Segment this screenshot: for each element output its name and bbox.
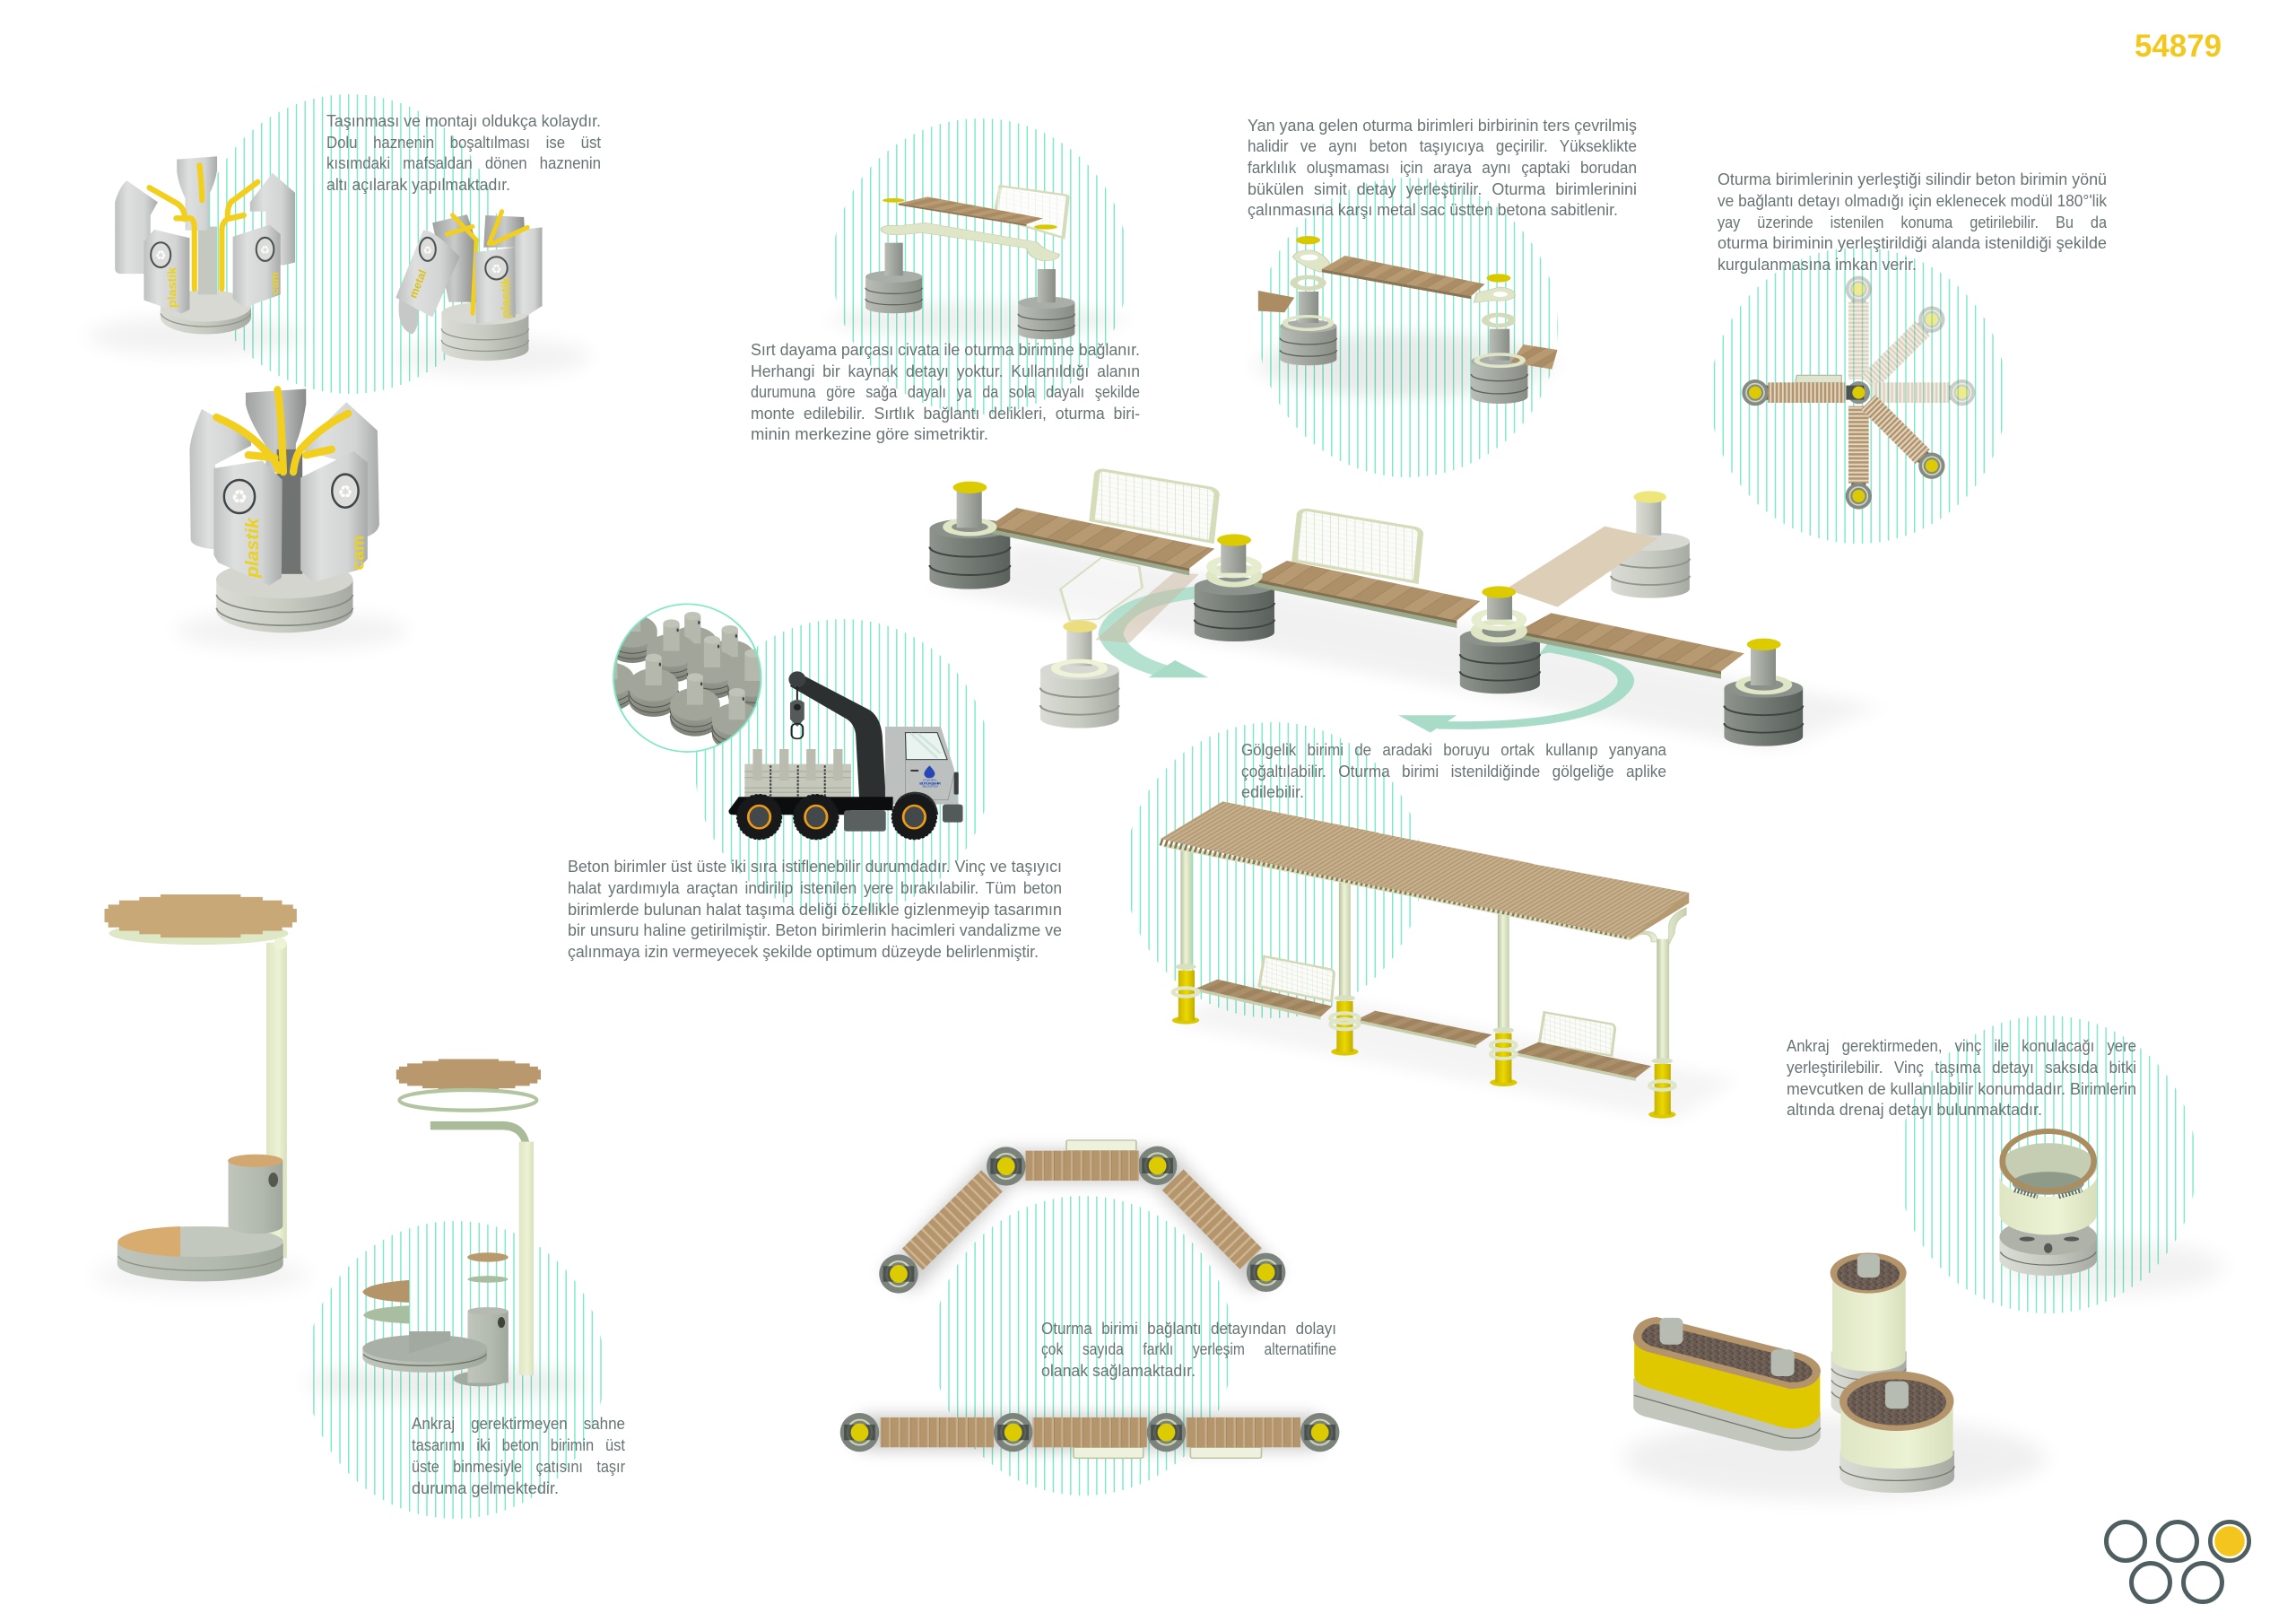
faded front unit [1040, 558, 1199, 728]
municipality logo: BÜYÜKŞEHİR [919, 781, 942, 785]
text: connection: farklılık oluşmaması için araya aynı çaptaki borudan [1248, 159, 1637, 177]
fuel tank [844, 810, 886, 832]
hatched circle: connection detail [1258, 178, 1558, 477]
hatched circle: truck [695, 619, 991, 915]
text: backrest: durumuna göre sağa dayalı ya da sola dayalı şekilde [751, 383, 1140, 401]
recycling bin: emptying, top right: ♻ [423, 244, 432, 257]
hatched circle: stage [307, 1221, 604, 1519]
hatched circle: rotation plan [1710, 248, 2006, 544]
wheel 3 [891, 795, 936, 840]
backrest 1 [1091, 470, 1217, 542]
stage: assembled [91, 894, 311, 1292]
text: rotation [1718, 170, 2108, 274]
text: backrest: Herhangi bir kaynak detayı yoktur. Kullanıldığı alanın [751, 362, 1140, 380]
chassis [728, 797, 893, 815]
planters [1622, 1131, 2224, 1500]
bumper [943, 805, 963, 823]
text: bins: Dolu haznenin boşaltılması ise üst [326, 134, 601, 152]
text: rotation: Oturma birimlerinin yerleştiği silindir beton birimin yönü [1718, 170, 2107, 188]
recycling bin: emptying, top right [394, 212, 592, 376]
text: truck: birimlerde bulunan halat taşıma deliği özellikle gizlenmeyip tasarımın [568, 901, 1062, 919]
pulley and hook [788, 671, 805, 738]
planter: oval yellow [1633, 1317, 1821, 1451]
hatched circle: planter [1899, 1016, 2196, 1313]
recycling bin: emptying, top right: ♻ [491, 263, 501, 276]
recycling bin: emptying, top right: plastik [499, 277, 513, 318]
text: bins: altı açılarak yapılmaktadır. [326, 176, 510, 194]
text: backrest: minin merkezine göre simetriktir. [751, 425, 988, 443]
cylinder and lower disc [454, 1307, 509, 1386]
backrest 2 [1294, 510, 1421, 582]
text: shelter: Gölgelik birimi de aradaki boruyu ortak kullanıp yanyana [1241, 741, 1667, 759]
wheel 1 [737, 795, 781, 840]
text: bins [326, 112, 601, 194]
text: connection: Yan yana gelen oturma birimleri birbirinin ters çevrilmiş [1248, 117, 1637, 135]
recycling bin: open, top left [86, 156, 306, 355]
seat B [1254, 561, 1480, 628]
rotation plan [1742, 276, 1975, 510]
concrete stack 4 [1460, 628, 1540, 693]
arrow: right rotation [1398, 643, 1626, 733]
text: stage: duruma gelmektedir. [412, 1479, 559, 1497]
base disc [117, 1226, 283, 1281]
posts, rings and lids [947, 482, 1787, 693]
canopy ring [399, 1090, 537, 1111]
columns [1180, 850, 1686, 1060]
L pipe [430, 1126, 526, 1374]
text: stage: tasarımı iki beton birimin üst [412, 1436, 625, 1454]
municipality logo [919, 765, 942, 788]
yellow footings [1172, 964, 1675, 1119]
logo: five circles [2106, 1522, 2249, 1602]
recycling bin: open, top left: ♻ [155, 249, 166, 264]
text: layouts: çok sayıda farklı yerleşim alternatifine [1041, 1340, 1336, 1358]
hatched circle: shelter [1126, 722, 1422, 1018]
wheel 2 [794, 795, 839, 840]
planter: round [1839, 1372, 1954, 1493]
recycling bin: open, top left: cam [269, 272, 282, 294]
text: shelter: çoğaltılabilir. Oturma birimi istenildiğinde gölgeliğe aplike [1241, 763, 1666, 780]
exploded bench with backrest [834, 186, 1120, 339]
exploded connection detail [1258, 236, 1557, 404]
text: rotation: yay üzerinde istenilen konuma getirilebilir. Bu da [1718, 214, 2108, 231]
text: truck: halat yardımıyla araçtan indirilip istenilen yere bırakılabilir. Tüm beton [568, 879, 1062, 897]
recycling bin: closed, large [174, 389, 409, 650]
text: layouts [1041, 1320, 1336, 1380]
plan layouts [840, 1140, 1339, 1458]
shelter [1161, 801, 1737, 1121]
column [266, 943, 287, 1258]
text: bins: kısımdaki mafsaldan dönen haznenin [326, 154, 601, 172]
crane truck [728, 671, 963, 840]
hatched circle: recycling bins [200, 94, 500, 394]
text: stage: Ankraj gerektirmeyen sahne [412, 1415, 625, 1433]
text: rotation: kurgulanmasına imkan verir. [1718, 256, 1917, 274]
text: rotation: ve bağlantı detayı olmadığı için eklenecek modül 180°'lik [1718, 192, 2108, 210]
concrete stack 2 [1195, 577, 1274, 641]
text: connection: bükülen simit detay yerleştirilir. Oturma birimlerinini [1248, 180, 1637, 198]
planter: exploded [1999, 1131, 2097, 1276]
text: layouts: Oturma birimi bağlantı detayından dolayı [1041, 1320, 1336, 1338]
backrests [1259, 956, 1615, 1056]
text: bins: Taşınması ve montajı oldukça kolaydır. [326, 112, 601, 130]
text: truck: bir unsuru haline getirilmiştir. Beton birimlerin hacimleri vandalizme ve [568, 921, 1062, 939]
recycling bin: closed, large: ♻ [231, 486, 248, 508]
stacked concrete inset [613, 603, 762, 753]
text: planters: altında drenaj detayı bulunmaktadır. [1787, 1101, 2042, 1119]
text: connection: çalınmasına karşı metal sac üstten betona sabitlenir. [1248, 201, 1618, 219]
text: shelter: edilebilir. [1241, 783, 1304, 801]
joint rings [1173, 988, 1674, 1090]
text: truck [568, 858, 1062, 961]
text: shelter [1241, 741, 1667, 801]
hatched circle: layout plans [934, 1196, 1233, 1496]
concrete stack 5 [1724, 679, 1803, 746]
text: stage: üste binmesiyle çatısını taşır [412, 1458, 625, 1476]
canopy wood [396, 1060, 541, 1091]
municipality logo: BELEDİYESİ [922, 784, 938, 788]
main bench assembly with rotation arrows [929, 470, 1878, 751]
stage: exploded [304, 1060, 589, 1399]
municipality logo: İSTANBUL [923, 778, 937, 781]
text: planters: mevcutken de kullanılabilir konumdadır. Birimlerin [1787, 1080, 2136, 1098]
seats [1196, 980, 1651, 1081]
title: project number: 54879 [2135, 29, 2222, 64]
concrete stack 1 [929, 519, 1010, 589]
recycling bin: closed, large: plastik [242, 517, 263, 579]
text: planters [1787, 1037, 2136, 1119]
text: planters: Ankraj gerektirmeden, vinç ile konulacağı yere [1787, 1037, 2136, 1055]
base disc [362, 1331, 487, 1373]
faded back unit [1506, 491, 1690, 607]
canopy wood [105, 894, 297, 937]
recycling bin: open, top left: plastik [165, 267, 178, 308]
arrow: left rotation [1111, 592, 1208, 677]
text: backrest [751, 341, 1140, 443]
text: backrest: Sırt dayama parçası civata ile oturma birimine bağlanır. [751, 341, 1140, 359]
plan: angled layout [879, 1140, 1285, 1294]
recycling bin: open, top left: ♻ [260, 243, 270, 257]
text: planters: yerleştirilebilir. Vinç taşıma detayı saksıda bitki [1787, 1059, 2136, 1077]
text: layouts: olanak sağlamaktadır. [1041, 1362, 1196, 1380]
hatched circle: backrest detail [832, 118, 1128, 414]
text: rotation: oturma biriminin yerleştirildiği alanda istenildiği şekilde [1718, 234, 2107, 252]
text: connection [1248, 117, 1637, 219]
recycling bin: emptying, top right: metal [407, 268, 429, 301]
recycling bin: closed, large: ♻ [338, 483, 352, 502]
text: stage [412, 1415, 625, 1497]
plan: straight layout [840, 1413, 1339, 1458]
seat C [1518, 613, 1744, 679]
roof panels [1161, 801, 1689, 940]
planter: tall [1831, 1252, 1907, 1418]
text: backrest: monte edilebilir. Sırtlık bağlantı delikleri, oturma biri- [751, 405, 1140, 423]
cab [885, 727, 959, 805]
text: connection: halidir ve aynı beton taşıyıcıya geçirilir. Yükseklikte [1248, 137, 1637, 155]
recycling bin: closed, large: cam [350, 536, 368, 571]
crane arm [790, 672, 886, 798]
cargo of concrete units [744, 749, 851, 797]
text: truck: çalınmaya izin vermeyecek şekilde optimum düzeyde belirlenmiştir. [568, 943, 1039, 961]
text: truck: Beton birimler üst üste iki sıra istiflenebilir durumdadır. Vinç ve taşıyıcı [568, 858, 1062, 876]
cylinder [228, 1155, 283, 1234]
canopy ring [109, 922, 288, 945]
wood and green discs [362, 1252, 509, 1323]
column [519, 1142, 534, 1375]
wheel arch [893, 792, 938, 815]
seat A [989, 508, 1214, 575]
